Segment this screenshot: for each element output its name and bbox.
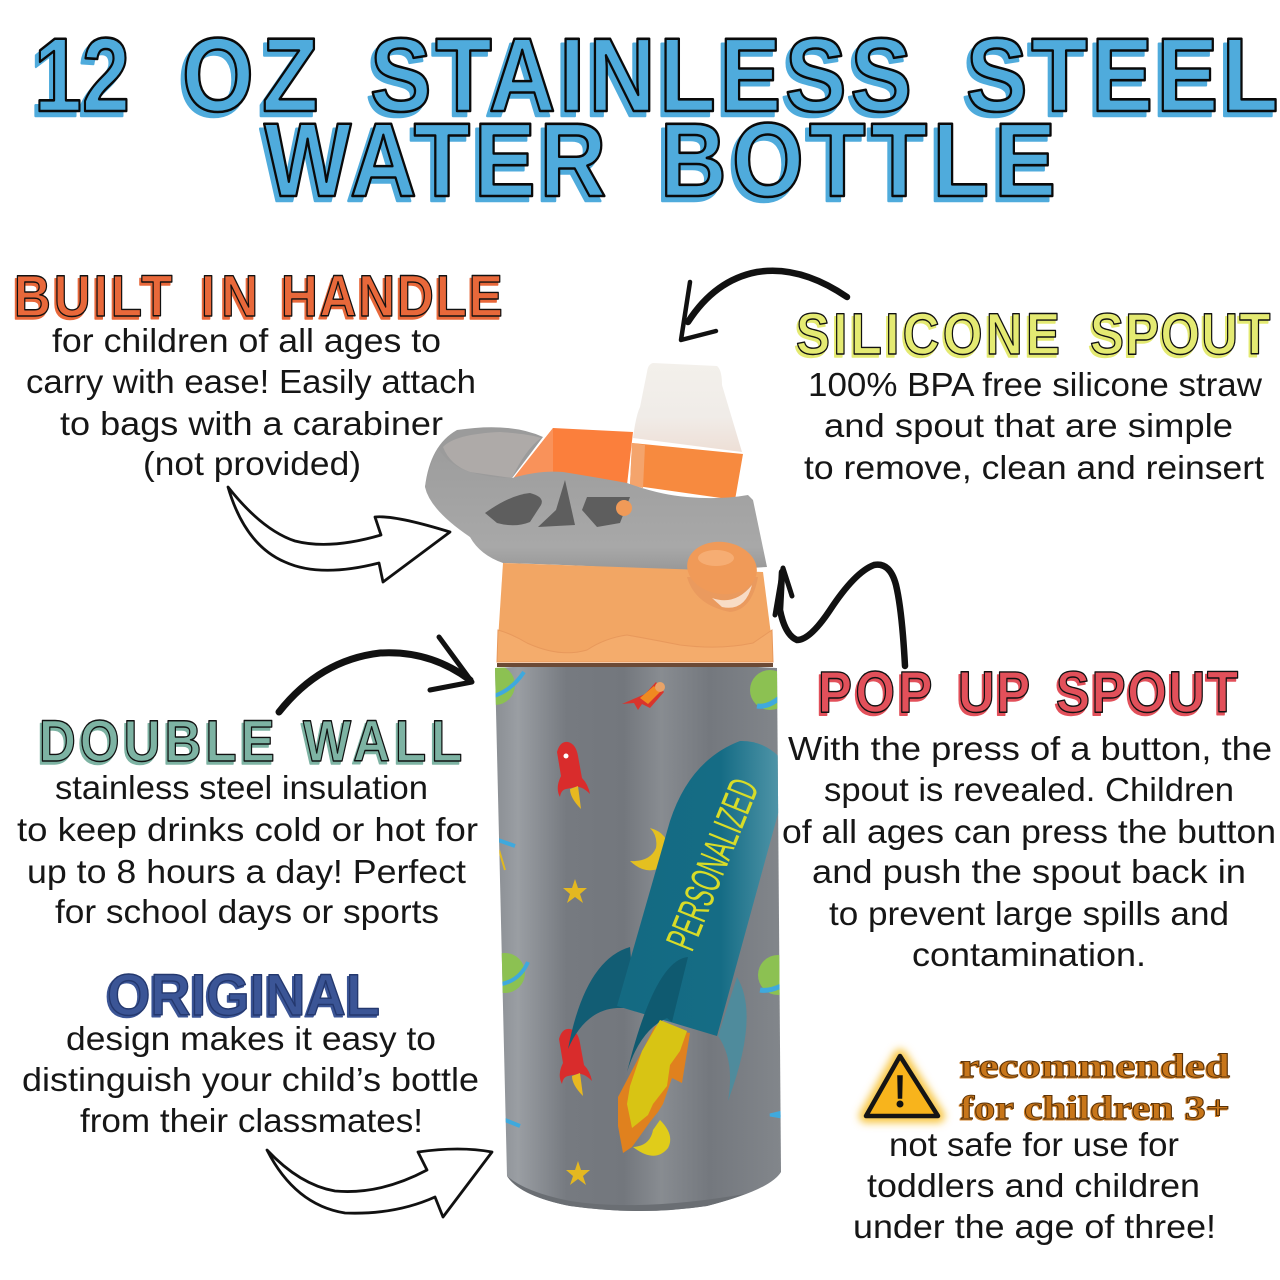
title line 1: STEEL: [966, 15, 1278, 133]
heading: built in handle: BUILT: [14, 264, 172, 329]
small rocket 1: [557, 742, 590, 809]
panel: double wall: [17, 709, 478, 930]
bottle body: [495, 667, 781, 1211]
heading: pop up spout: SPOUT: [1056, 660, 1238, 725]
push button: [684, 537, 760, 612]
text: silicone spout: [804, 366, 1264, 486]
heading: recommended for children: recommended: [960, 1048, 1230, 1085]
panel: original: [22, 963, 479, 1139]
text: silicone spout: 100% BPA free silicone straw: [808, 366, 1262, 403]
right fin: [718, 977, 747, 1101]
text: age warning: [853, 1126, 1216, 1245]
lower cap: [497, 563, 773, 662]
panel: silicone spout: [796, 302, 1270, 486]
grey collar: [425, 448, 767, 572]
text: pop up spout: With the press of a button, the: [788, 730, 1272, 767]
text: built in handle: (not provided): [143, 445, 361, 482]
title line 2: WATER: [264, 100, 606, 218]
title line 1: OZ: [182, 15, 318, 133]
title line 1: [34, 15, 1278, 134]
text: double wall: stainless steel insulation: [55, 769, 428, 806]
text: pop up spout: to prevent large spills and: [829, 895, 1229, 932]
heading: built in handle: [14, 264, 503, 329]
orange spout: [630, 443, 743, 500]
text: original: design makes it easy to: [66, 1020, 436, 1057]
text: double wall: [17, 769, 478, 930]
text: pop up spout: of all ages can press the button: [782, 813, 1276, 850]
bottle lid: [425, 363, 773, 667]
rocket body: [617, 741, 790, 1036]
text: double wall: to keep drinks cold or hot for: [17, 811, 478, 848]
title: [34, 15, 1278, 218]
text: double wall: up to 8 hours a day! Perfect: [27, 853, 466, 890]
panel: built in handle: [14, 264, 503, 482]
title line 1: 12: [34, 17, 130, 134]
flame moon: [633, 1120, 670, 1156]
small rocket 2: [559, 1029, 592, 1096]
text: double wall: for school days or sports: [55, 893, 439, 930]
heading: recommended for children: for children 3+: [960, 1090, 1230, 1127]
text: pop up spout: and push the spout back in: [812, 853, 1246, 890]
heading: pop up spout: UP: [958, 660, 1030, 725]
text: original: from their classmates!: [80, 1102, 423, 1139]
title line 1: STAINLESS: [370, 15, 912, 133]
text: built in handle: to bags with a carabiner: [60, 405, 443, 442]
heading: double wall: DOUBLE: [39, 709, 275, 774]
text: age warning: under the age of three!: [853, 1208, 1216, 1245]
flame: [618, 1026, 690, 1153]
text: silicone spout: and spout that are simple: [824, 407, 1233, 444]
heading: double wall: [39, 709, 462, 774]
collar holes: [485, 480, 632, 527]
heading: built in handle: HANDLE: [281, 264, 503, 329]
heading: recommended for children: [960, 1048, 1230, 1127]
planets: [495, 668, 781, 1128]
text: original: distinguish your child’s bottle: [22, 1061, 479, 1098]
text: built in handle: for children of all ages to: [52, 322, 441, 359]
arrow: original: [267, 1149, 492, 1217]
left fin: [568, 947, 635, 1049]
panel: age warning: [853, 1048, 1230, 1245]
text: built in handle: [26, 322, 476, 482]
heading: pop up spout: POP: [818, 660, 932, 725]
heading: built in handle: IN: [201, 264, 258, 329]
heading: pop up spout: [818, 660, 1238, 725]
text: pop up spout: [782, 730, 1276, 973]
handle loop: [425, 427, 543, 537]
panel: pop up spout: [782, 660, 1276, 973]
arrow: handle: [228, 487, 450, 582]
heading: original: ORIGINAL: [107, 963, 380, 1028]
arrow: pop up spout: [775, 565, 905, 666]
arrow: double wall: [279, 637, 472, 712]
text: built in handle: carry with ease! Easily attach: [26, 363, 476, 400]
icon: warning triangle: [866, 1056, 938, 1116]
text: age warning: toddlers and children: [867, 1167, 1200, 1204]
arrow: silicone spout: [681, 271, 847, 340]
stars: [563, 879, 590, 1185]
bottle: [425, 363, 798, 1211]
center fin: [627, 957, 688, 1072]
text: pop up spout: spout is revealed. Children: [824, 771, 1234, 808]
text: silicone spout: to remove, clean and reinsert: [804, 449, 1264, 486]
orange flap: [512, 428, 633, 485]
title line 2: [264, 100, 1056, 218]
bottle print: [495, 668, 781, 1185]
moon: [630, 828, 669, 870]
heading: silicone spout: [796, 302, 1270, 367]
heading: silicone spout: SPOUT: [1090, 302, 1270, 367]
text: original: [22, 1020, 479, 1139]
big rocket: [568, 741, 790, 1156]
heading: silicone spout: SILICONE: [796, 302, 1060, 367]
heading: double wall: WALL: [303, 709, 462, 774]
title line 2: BOTTLE: [660, 100, 1056, 218]
text: age warning: not safe for use for: [889, 1126, 1179, 1163]
rocket label: PERSONALIZED: [657, 772, 768, 956]
text: pop up spout: contamination.: [912, 936, 1146, 973]
silicone spout tip: [633, 363, 742, 452]
comet: [622, 682, 665, 710]
